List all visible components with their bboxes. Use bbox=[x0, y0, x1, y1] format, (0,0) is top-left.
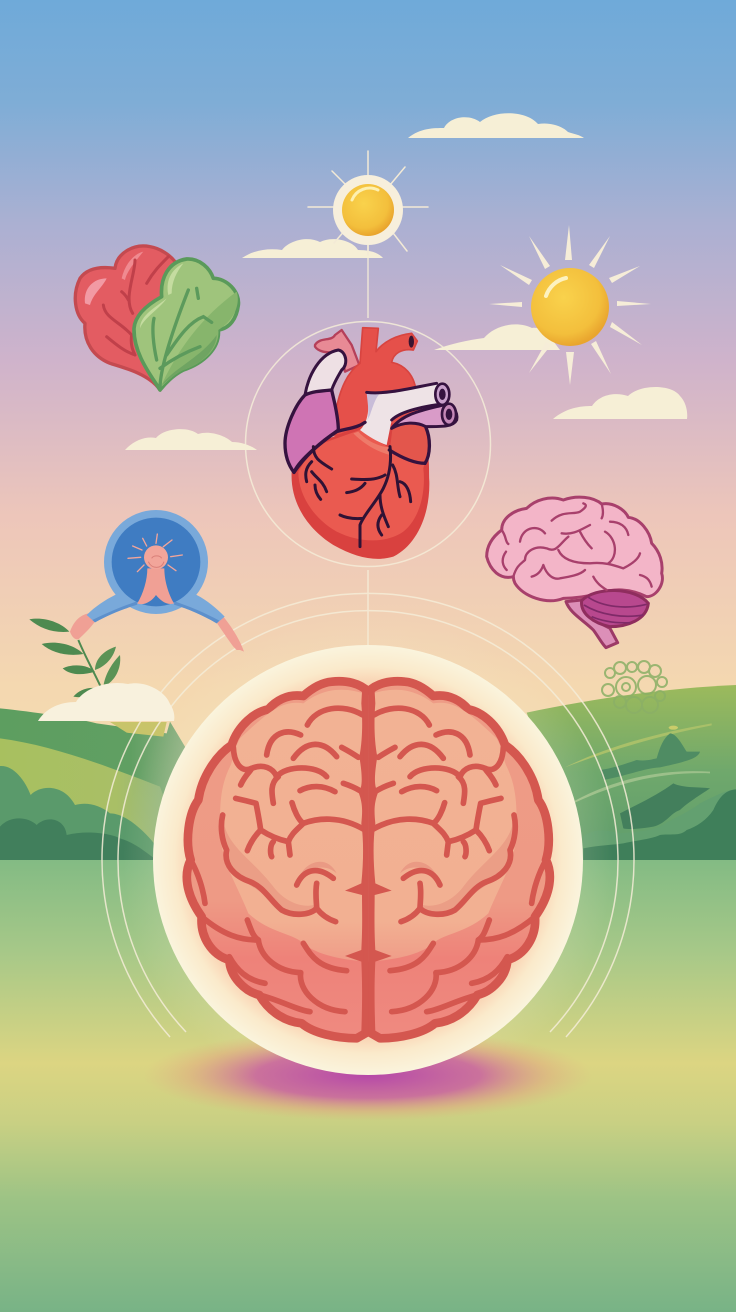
cloud behind big sun bbox=[434, 324, 560, 350]
left hand bbox=[70, 613, 95, 639]
icon: large sun bbox=[489, 225, 651, 385]
cerebrum bbox=[487, 497, 662, 601]
soft halo bbox=[123, 615, 613, 1105]
background ground bbox=[0, 860, 736, 1312]
aorta bbox=[333, 328, 427, 435]
cloud top right bbox=[408, 113, 584, 138]
chamber lines bbox=[294, 422, 429, 472]
connector lines and concentric arcs bbox=[102, 245, 634, 1037]
purple glow bbox=[143, 1029, 593, 1121]
glowing orb bbox=[153, 645, 583, 1075]
vessel openings bbox=[435, 384, 449, 405]
folds bbox=[502, 503, 652, 590]
head bbox=[144, 545, 168, 569]
cloud left bbox=[125, 429, 257, 450]
icon: faint green emblem bbox=[602, 661, 667, 713]
cerebellum bbox=[582, 590, 648, 627]
large brain bbox=[187, 681, 550, 1038]
right hand bbox=[217, 617, 244, 652]
left hills bbox=[0, 708, 200, 860]
background sky bbox=[0, 0, 736, 860]
sleeves bbox=[87, 587, 225, 623]
brain stem bbox=[566, 600, 618, 648]
right hills bbox=[527, 685, 736, 860]
white main vessel bbox=[360, 383, 447, 445]
purple atrium bbox=[285, 390, 338, 472]
icon: leaves bbox=[75, 246, 238, 390]
cloud under small sun bbox=[242, 239, 383, 258]
torso bbox=[137, 568, 174, 604]
cloud lower right bbox=[553, 387, 687, 419]
pulmonary artery bbox=[315, 330, 359, 372]
heart body bbox=[292, 422, 429, 559]
icon: small brain bbox=[487, 497, 662, 648]
icon: plant sprig bbox=[29, 619, 120, 697]
icon: small sun bbox=[308, 151, 428, 255]
rays bbox=[128, 534, 182, 572]
lower pink vessel bbox=[392, 405, 457, 428]
cloud by plant bbox=[38, 683, 174, 721]
coronary arteries bbox=[306, 447, 411, 547]
icon: heart bbox=[285, 328, 457, 559]
halo circle bbox=[104, 510, 208, 614]
icon: meditating figure in circle bbox=[70, 510, 244, 652]
white vessel left bbox=[305, 350, 346, 395]
